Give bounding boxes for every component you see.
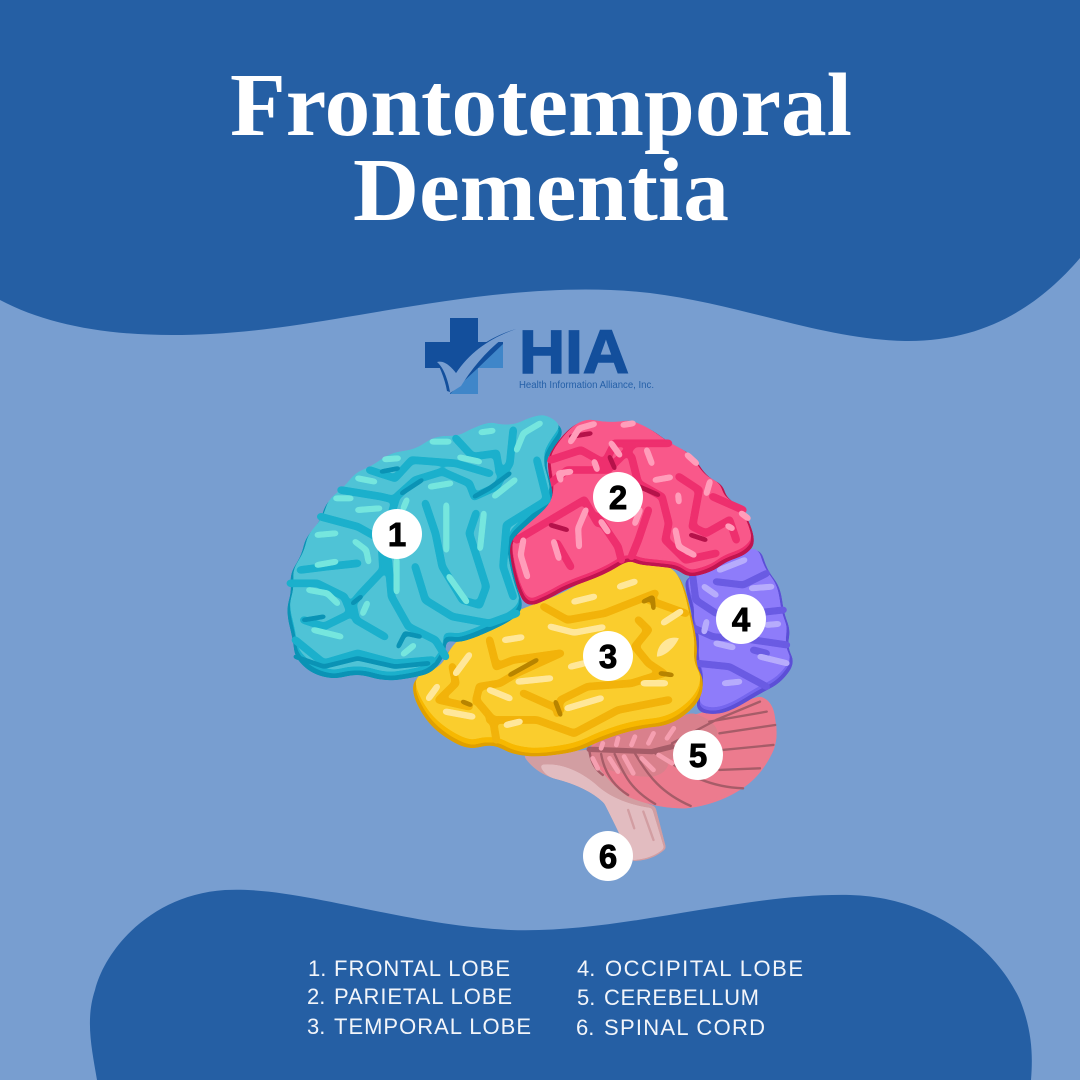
- marker 1: 1: [388, 516, 406, 553]
- marker 2: 2: [609, 479, 627, 516]
- title: [230, 56, 852, 240]
- occipital lobe: [686, 546, 793, 714]
- marker 3: [583, 631, 633, 681]
- marker 2: [593, 472, 643, 522]
- legend: 3.: [307, 1014, 325, 1039]
- cerebellum: [588, 697, 777, 808]
- legend: OCCIPITAL LOBE: [605, 956, 803, 981]
- legend: CEREBELLUM: [604, 985, 759, 1010]
- top header wave: [0, 0, 1080, 341]
- marker 1: [372, 509, 422, 559]
- legend: SPINAL CORD: [604, 1015, 765, 1040]
- legend: 5.: [577, 985, 595, 1010]
- marker 6: 6: [599, 838, 617, 875]
- logo: HIA: [425, 318, 654, 394]
- legend: 2.: [307, 984, 325, 1009]
- frontal lobe: [288, 413, 562, 680]
- legend: FRONTAL LOBE: [334, 956, 510, 981]
- parietal lobe: [510, 417, 754, 605]
- legend: 1.: [308, 956, 326, 981]
- title: Dementia: [353, 141, 729, 240]
- legend: 4.: [577, 956, 595, 981]
- icon: medical cross with check: [425, 318, 516, 394]
- logo wordmark: HIA: [519, 318, 629, 386]
- brain stem: [523, 750, 666, 861]
- marker 4: [716, 594, 766, 644]
- title: Frontotemporal: [230, 56, 852, 155]
- brain illustration: [288, 413, 793, 861]
- marker 3: 3: [599, 638, 617, 675]
- legend: 6.: [576, 1015, 594, 1040]
- logo tagline: Health Information Alliance, Inc.: [519, 380, 654, 391]
- marker 5: [673, 730, 723, 780]
- temporal lobe: [413, 557, 703, 756]
- marker 5: 5: [689, 737, 707, 774]
- bottom legend wave: [90, 890, 1032, 1080]
- legend: PARIETAL LOBE: [334, 984, 512, 1009]
- marker 6: [583, 831, 633, 881]
- legend: [307, 956, 803, 1040]
- marker 4: 4: [732, 601, 751, 638]
- legend: TEMPORAL LOBE: [334, 1014, 531, 1039]
